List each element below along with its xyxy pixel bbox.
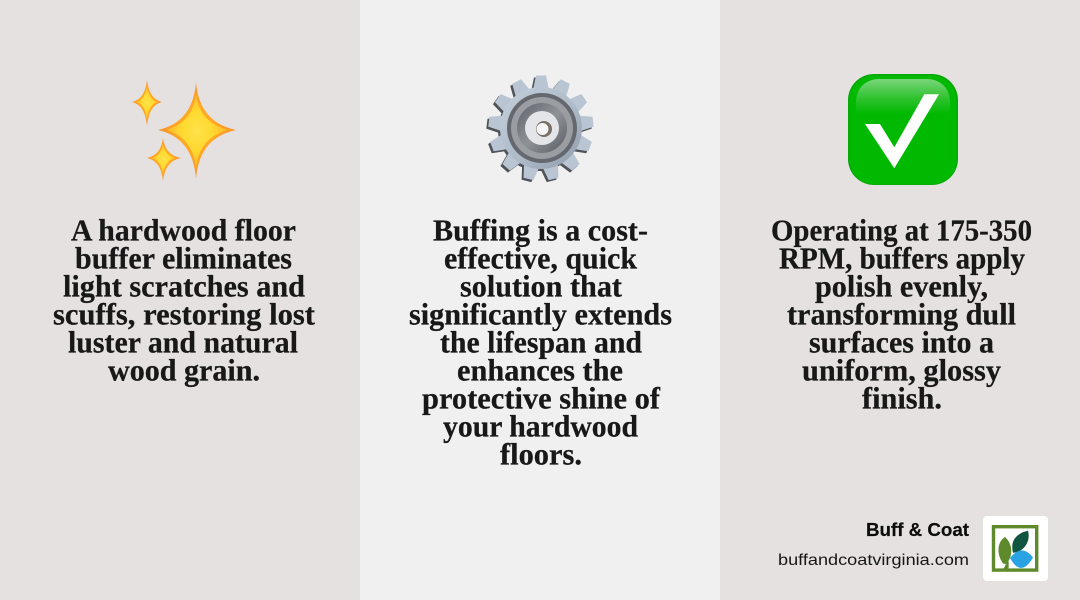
text: RPM and glossy finish: transforming dull	[787, 296, 1016, 332]
text: cost-effective solution: protective shine of	[422, 380, 661, 416]
text: scratches and luster: buffer eliminates	[75, 240, 292, 276]
website url: buffandcoatvirginia.com	[778, 552, 969, 569]
text: RPM and glossy finish: polish evenly,	[815, 268, 988, 304]
text: RPM and glossy finish: RPM, buffers apply	[779, 240, 1025, 276]
text: scratches and luster: A hardwood floor	[71, 212, 296, 248]
text: scratches and luster	[53, 212, 316, 388]
text: RPM and glossy finish: Operating at 175-350	[771, 212, 1032, 248]
text: cost-effective solution: Buffing is a cost-	[433, 212, 648, 248]
panel: left	[0, 0, 360, 600]
text: scratches and luster: light scratches and	[63, 268, 305, 304]
icon: gear	[486, 76, 594, 183]
icon: sparkles	[132, 80, 236, 181]
panel: middle	[360, 0, 720, 600]
text: scratches and luster: wood grain.	[108, 352, 260, 388]
text: cost-effective solution: floors.	[500, 436, 582, 472]
text: RPM and glossy finish	[771, 212, 1032, 416]
logo	[983, 516, 1048, 581]
panel: right	[720, 0, 1080, 600]
text: RPM and glossy finish: finish.	[862, 380, 942, 416]
brand name: Buff & Coat	[866, 520, 969, 540]
text: cost-effective solution: solution that	[460, 268, 623, 304]
text: cost-effective solution: enhances the	[457, 352, 623, 388]
icon: check mark	[848, 74, 958, 185]
text: scratches and luster: luster and natural	[68, 324, 298, 360]
text: RPM and glossy finish: surfaces into a	[809, 324, 994, 360]
text: cost-effective solution: significantly extends	[409, 296, 672, 332]
text: cost-effective solution: your hardwood	[443, 408, 638, 444]
text: cost-effective solution: effective, quick	[444, 240, 638, 276]
text: cost-effective solution	[409, 212, 672, 472]
text: scratches and luster: scuffs, restoring lost	[53, 296, 316, 332]
text: RPM and glossy finish: uniform, glossy	[802, 352, 1001, 388]
text: cost-effective solution: the lifespan and	[440, 324, 642, 360]
